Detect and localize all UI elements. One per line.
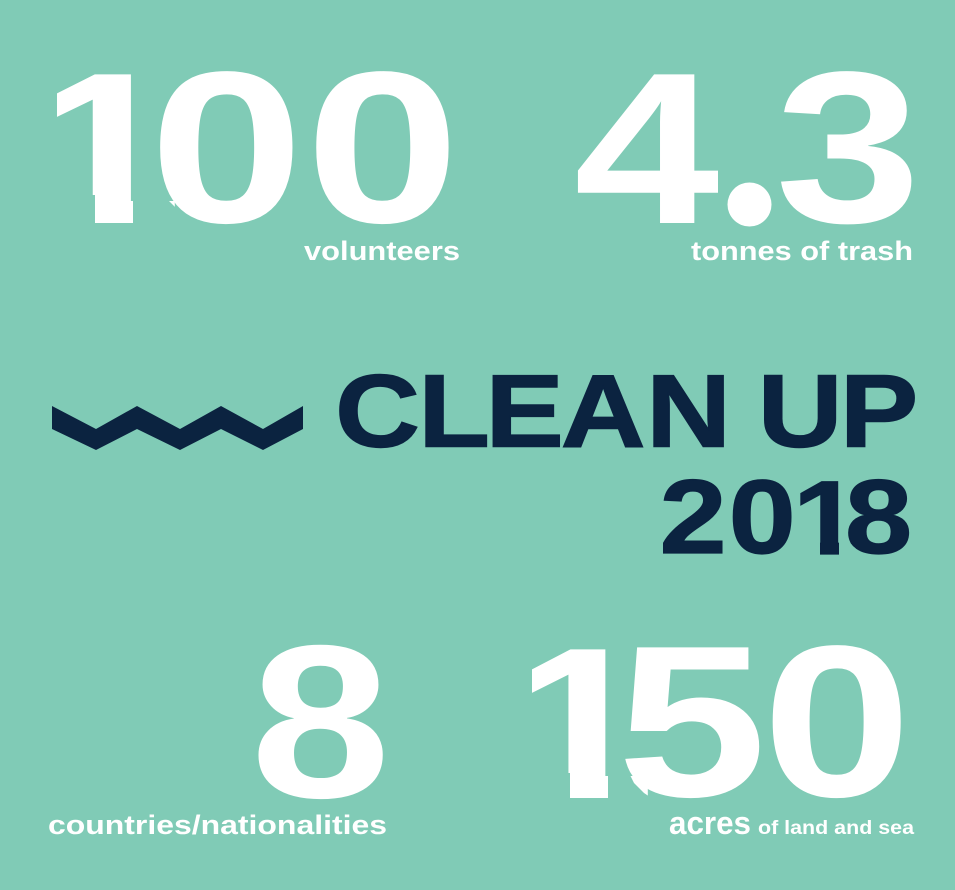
title: Clean Up 2018	[339, 374, 915, 555]
stat: 8 countries/nationalities	[48, 601, 390, 844]
title line: CLEAN UP: CLEAN UP	[335, 354, 918, 469]
label: acres: acres	[669, 805, 751, 841]
number: 100: 100	[28, 27, 460, 269]
label: countries/nationalities: countries/nationalities	[48, 810, 387, 840]
icon: wave	[52, 406, 303, 450]
stat: 100 volunteers	[57, 71, 459, 260]
stat: 4.3 tonnes of trash	[578, 71, 912, 260]
number: 4.3	[578, 71, 912, 226]
number: 4.3: 3	[775, 27, 921, 268]
label: volunteers: volunteers	[304, 236, 460, 266]
stat: 150 acres of land and sea	[532, 645, 914, 834]
title line: 2018: 2018	[660, 458, 912, 576]
label: of land and sea: of land and sea	[758, 818, 914, 839]
number: 150: 150	[506, 600, 912, 844]
number: 4.3: 4	[574, 28, 720, 269]
number: 8: 8	[250, 601, 390, 844]
label: tonnes of trash: tonnes of trash	[691, 236, 913, 266]
